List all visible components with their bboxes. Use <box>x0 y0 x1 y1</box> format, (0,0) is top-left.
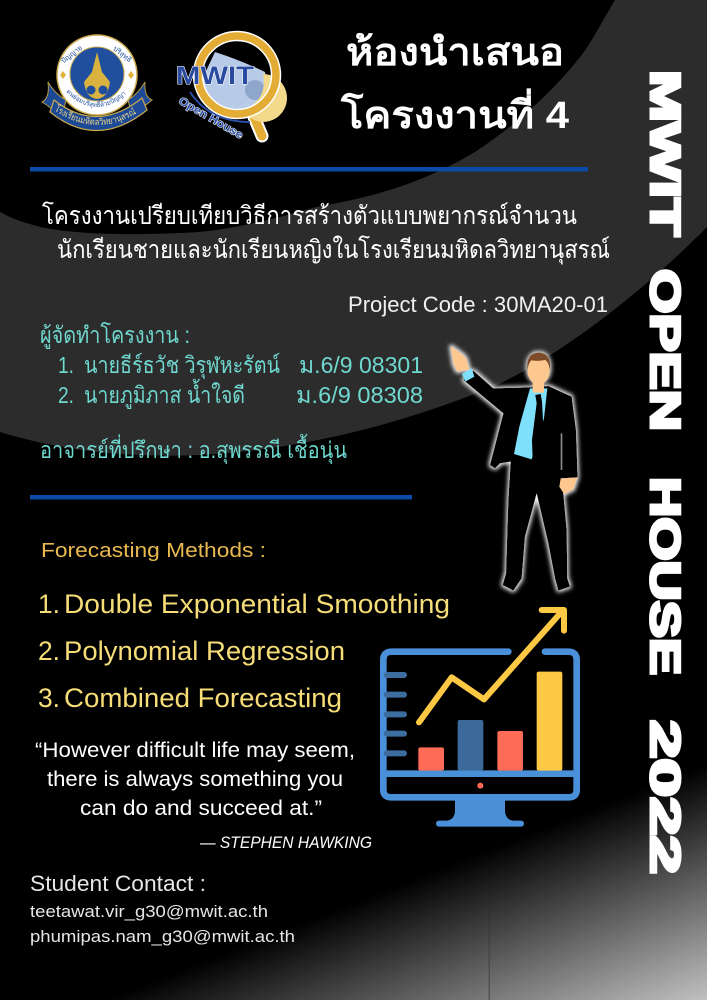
project team: 1. <box>58 352 74 378</box>
forecasting methods list: Combined Forecasting <box>64 683 342 713</box>
title: ห้องนำเสนอ <box>346 32 564 74</box>
background corner gradient <box>0 700 707 1000</box>
advisor: อาจารย์ที่ปรึกษา : อ.สุพรรณี เชื้อนุ่น <box>40 434 347 464</box>
logo: school seal: ตนย่อมบริสุทธิ์ด้วยปัญญา <box>66 90 126 108</box>
project title: โครงงานเปรียบเทียบวิธีการสร้างตัวแบบพยากรณ์จำนวน <box>42 201 577 230</box>
project team: นายธีร์ธวัช วิรุฬหะรัตน์ <box>84 352 280 379</box>
forecasting methods list: 2. <box>38 636 60 666</box>
project team: ผู้จัดทำโครงงาน : <box>40 322 190 349</box>
project team: ม.6/9 08301 <box>299 352 423 378</box>
forecasting methods list: 3. <box>38 683 60 713</box>
quote: there is always something you <box>47 768 343 791</box>
logo: school seal <box>41 34 153 132</box>
title: โครงงานที่ 4 <box>340 88 569 137</box>
vertical heading: MWIT OPEN HOUSE 2022: 2022 <box>642 720 689 874</box>
logo: school seal: โรงเรียนมหิดลวิทยานุสรณ์ <box>56 104 136 125</box>
project title: นักเรียนชายและนักเรียนหญิงในโรงเรียนมหิดลวิทยานุสรณ์ <box>57 235 610 265</box>
vertical heading: MWIT OPEN HOUSE 2022: OPEN <box>642 269 689 431</box>
logo: MWIT Open House magnifier <box>176 36 287 142</box>
background swoosh <box>0 0 707 456</box>
forecasting methods list <box>38 589 450 713</box>
forecasting methods list: 1. <box>38 589 60 619</box>
illustration: businessman pointing <box>451 346 578 591</box>
quote: “However difficult life may seem, <box>35 739 355 762</box>
student contact: Student Contact : <box>30 871 206 896</box>
vertical heading: MWIT OPEN HOUSE 2022: HOUSE <box>642 477 689 675</box>
logo: MWIT Open House magnifier: MWIT <box>176 62 254 90</box>
project team: 2. <box>58 382 74 408</box>
logo: MWIT Open House magnifier: Open House <box>176 95 245 142</box>
project team: นายภูมิภาส น้ำใจดี <box>84 379 245 409</box>
quote attribution: — STEPHEN HAWKING <box>199 833 372 852</box>
divider: top blue line <box>30 167 588 172</box>
quote: can do and succeed at.” <box>80 797 322 820</box>
forecasting methods list: Double Exponential Smoothing <box>64 589 450 619</box>
vertical heading: MWIT OPEN HOUSE 2022: MWIT <box>642 70 689 237</box>
forecasting heading: Forecasting Methods : <box>41 540 266 562</box>
project code: Project Code : 30MA20-01 <box>348 292 608 317</box>
vertical heading: MWIT OPEN HOUSE 2022 <box>642 70 689 874</box>
student contact: teetawat.vir_g30@mwit.ac.th <box>30 902 268 921</box>
quote <box>35 739 355 820</box>
project title <box>42 201 610 265</box>
student contact <box>30 871 295 946</box>
forecasting methods list: Polynomial Regression <box>64 636 345 666</box>
project team: ม.6/9 08308 <box>296 382 423 408</box>
student contact: phumipas.nam_g30@mwit.ac.th <box>30 927 295 946</box>
icon: monitor with growth chart <box>383 610 577 827</box>
title <box>340 32 569 137</box>
divider: lower blue line <box>30 495 412 500</box>
logo: school seal: ปัญญาย <box>60 44 84 65</box>
project team <box>40 322 423 409</box>
logo: school seal: ปริสุทฺธิ <box>111 45 133 64</box>
